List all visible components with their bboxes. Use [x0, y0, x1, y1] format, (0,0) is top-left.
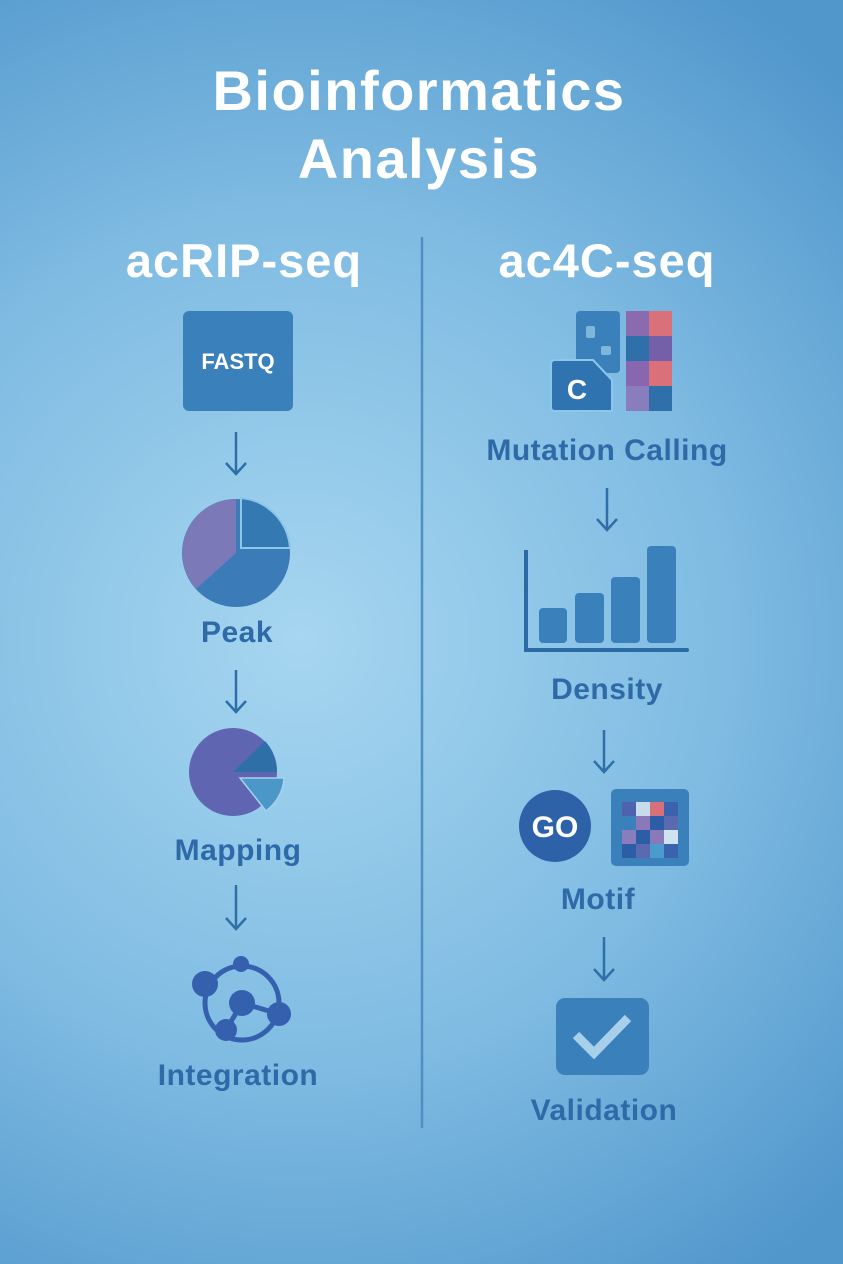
- icon: mutation calling: [551, 311, 672, 411]
- icon: motif grid: [611, 789, 689, 866]
- icon: network integration: [192, 956, 291, 1041]
- label: Validation: Validation: [531, 1094, 677, 1127]
- arrow 2 left: [226, 670, 246, 712]
- arrow 3 right: [594, 937, 614, 980]
- icon: bar chart density: [524, 546, 689, 652]
- arrow 1 right: [597, 488, 617, 530]
- icon: GO circle: [519, 790, 591, 862]
- icon: mutation calling: C: [567, 374, 587, 405]
- label: Motif: Motif: [561, 883, 636, 916]
- label: Mapping: Mapping: [175, 834, 301, 867]
- icon: validation check: [556, 998, 649, 1075]
- title: Analysis: [298, 127, 540, 190]
- title: [212, 59, 626, 190]
- icon: FASTQ box: [183, 311, 293, 411]
- icon: pie chart peak: [182, 498, 290, 607]
- icon: GO circle: GO: [532, 811, 578, 844]
- arrow 3 left: [226, 885, 246, 929]
- label: Density: Density: [551, 673, 663, 706]
- label: Integration: Integration: [158, 1059, 318, 1092]
- heading: acRIP-seq: acRIP-seq: [126, 234, 362, 287]
- icon: FASTQ box: FASTQ: [201, 349, 275, 374]
- icon: pie chart mapping: [189, 728, 284, 816]
- label: Mutation Calling: Mutation Calling: [486, 434, 728, 467]
- arrow 1 left: [226, 432, 246, 474]
- arrow 2 right: [594, 730, 614, 772]
- heading: ac4C-seq: ac4C-seq: [498, 234, 716, 287]
- label: Peak: Peak: [201, 616, 273, 649]
- title: Bioinformatics: [212, 59, 626, 122]
